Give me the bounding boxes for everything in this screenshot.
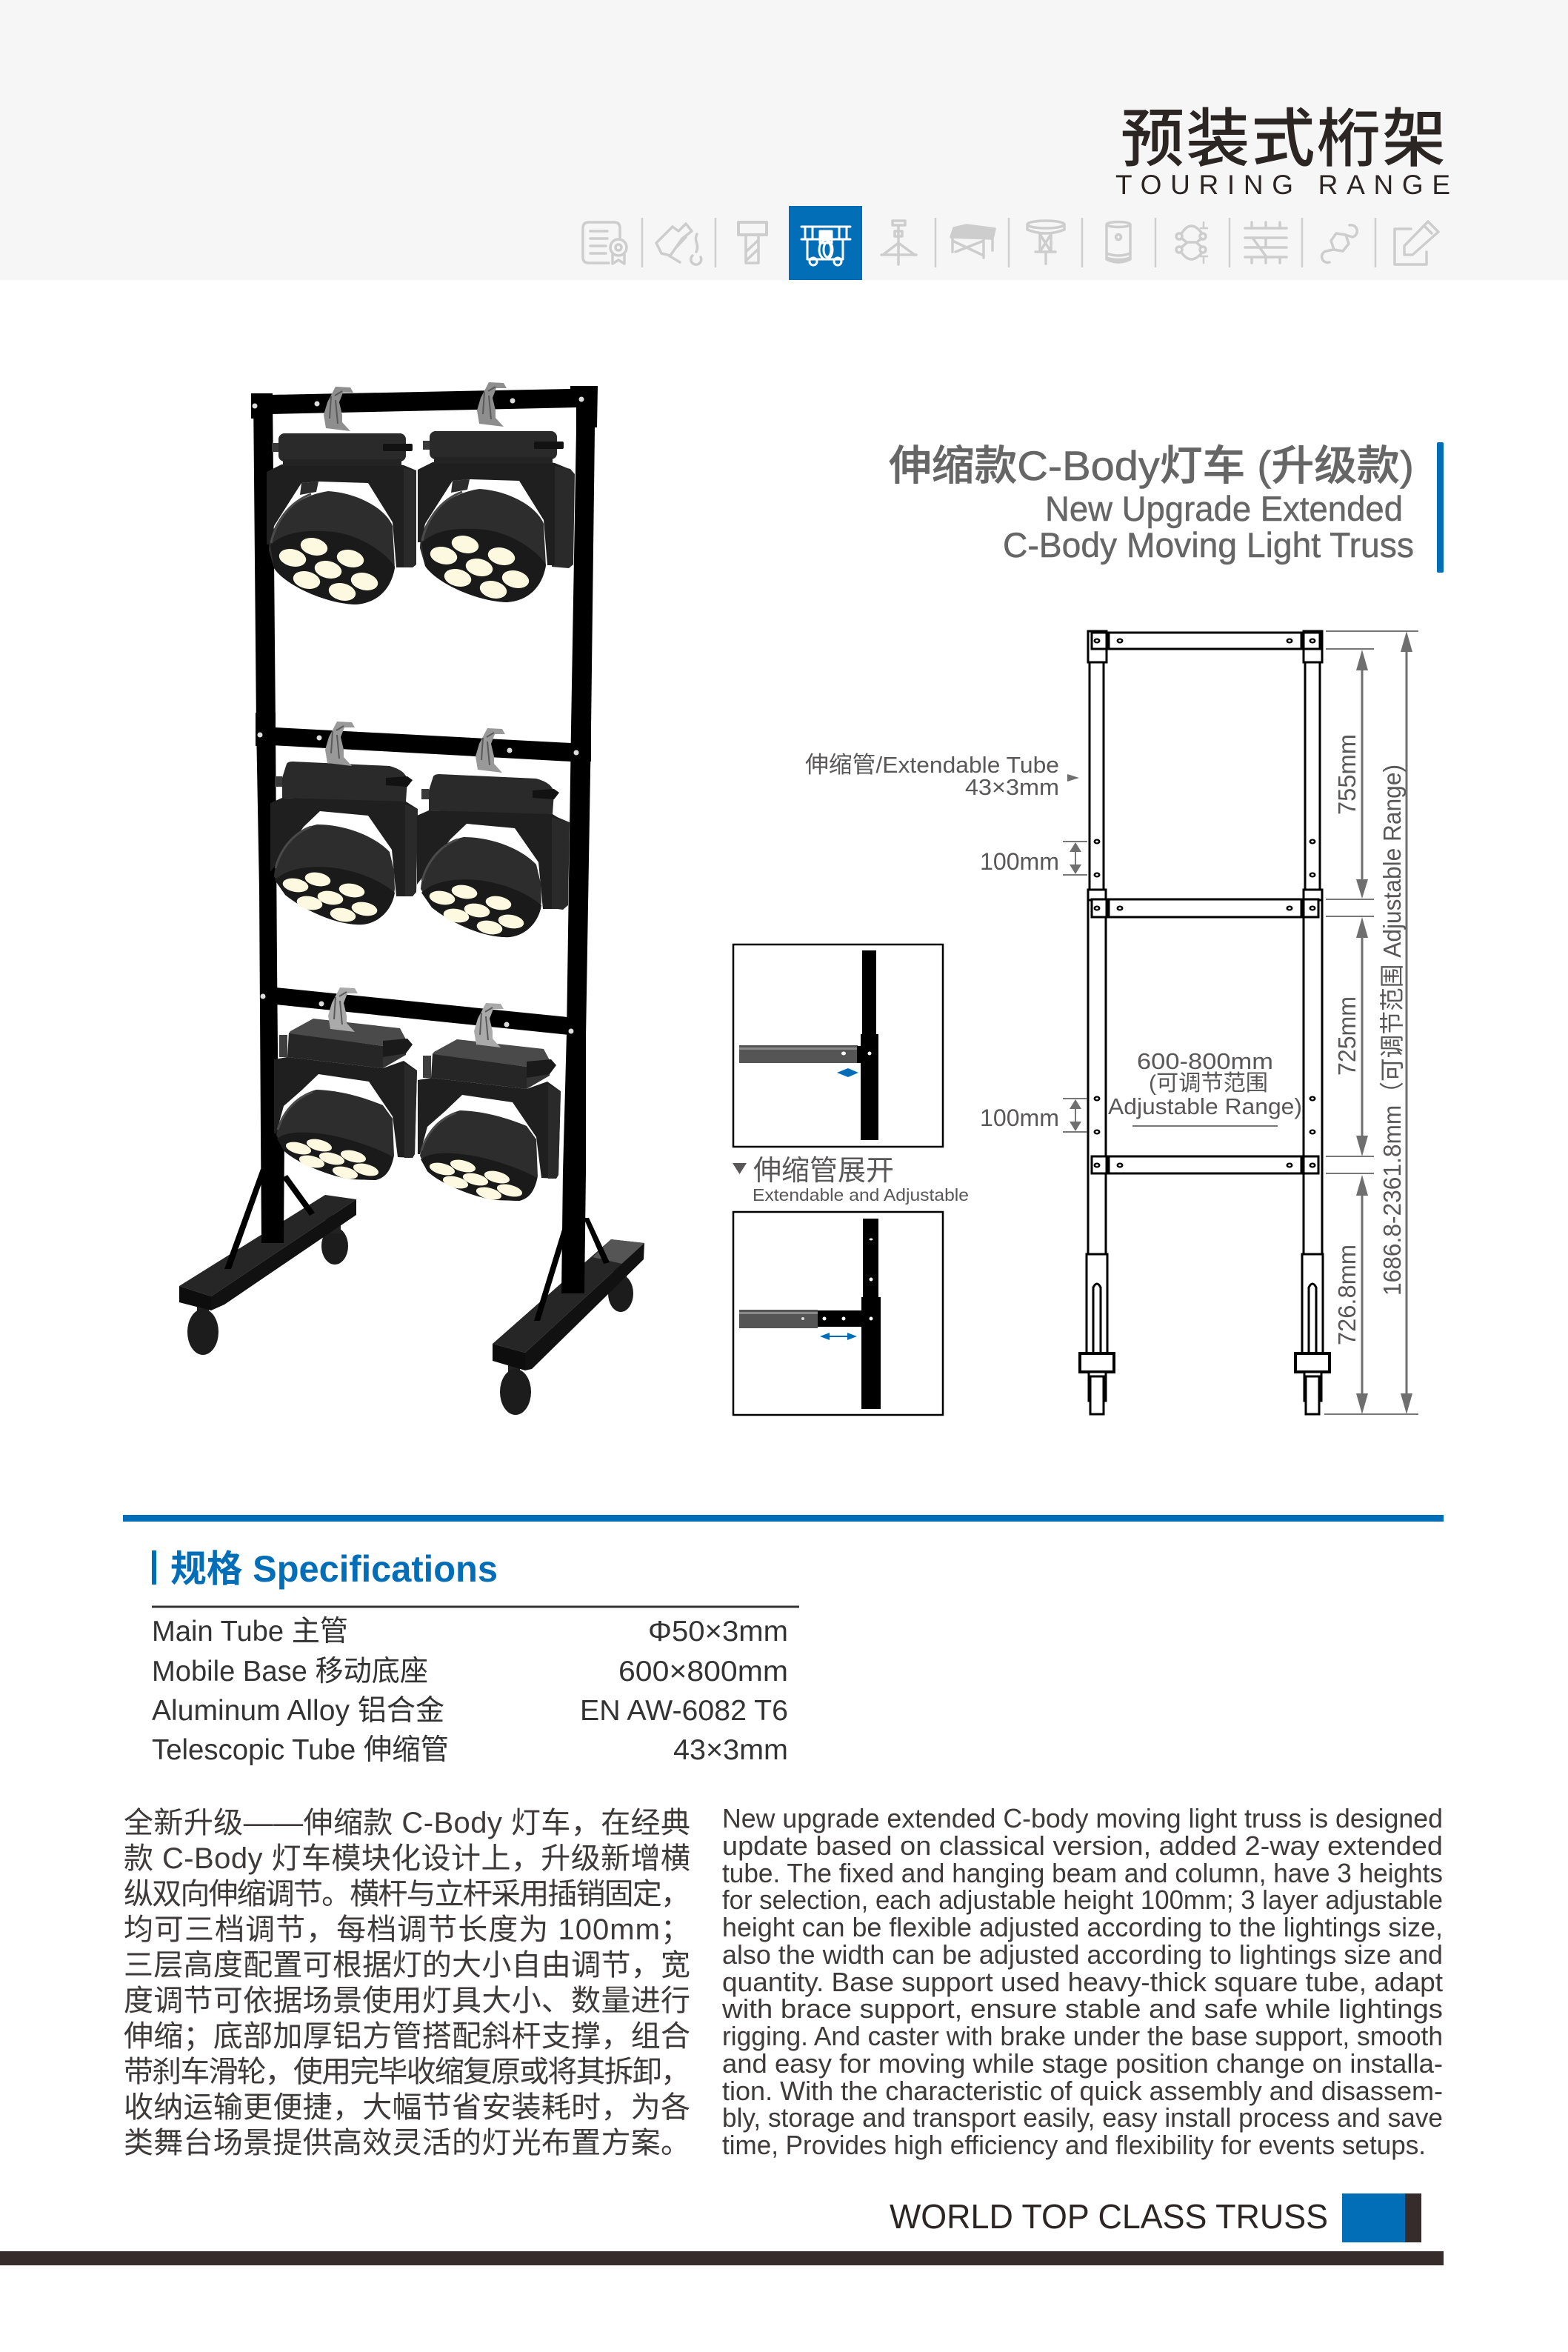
spec row: telescopic tube <box>152 1734 788 1766</box>
icon: double clamp <box>1176 222 1207 263</box>
spec row: aluminum alloy: EN AW-6082 T6 <box>580 1695 788 1727</box>
english description: update based on classical version, added 2-way extended <box>722 1830 1443 1861</box>
spec row: main tube: Main Tube 主管 <box>152 1616 348 1648</box>
right base beam <box>493 1239 644 1370</box>
footer slogan: WORLD TOP CLASS TRUSS <box>890 2197 1328 2236</box>
dimension 725mm: 725mm <box>1333 996 1361 1076</box>
chinese description: 全新升级——伸缩款 C-Body 灯车，在经典 <box>124 1807 690 1839</box>
middle beam <box>1088 890 1322 917</box>
icon: lift table <box>1027 221 1064 264</box>
english description: tion. With the characteristic of quick assembly and disassem- <box>722 2076 1443 2106</box>
english description: rigging. And caster with brake under the base support, smooth <box>722 2021 1443 2051</box>
chinese description: 三层高度配置可根据灯的大小自由调节，宽 <box>124 1949 690 1982</box>
blue arrow short <box>837 1068 858 1077</box>
icon: edit note <box>1395 221 1438 264</box>
english description: New upgrade extended C-body moving light truss is designed <box>722 1803 1443 1833</box>
icon: tripod tower <box>881 221 916 264</box>
english description: also the width can be adjusted according to lightings size and <box>722 1939 1443 1970</box>
dimension lines <box>1324 631 1418 1414</box>
english description <box>721 1803 1443 2160</box>
product render: mobile truss cart with moving lights <box>179 382 644 1415</box>
chinese description: 伸缩；底部加厚铝方管搭配斜杆支撑，组合 <box>124 2020 690 2053</box>
spec row: aluminum alloy <box>152 1695 788 1727</box>
100mm label lower: 100mm <box>980 1105 1059 1131</box>
icon: tools <box>656 224 701 264</box>
heading accent bar <box>1437 442 1444 573</box>
moving lights row 3 <box>274 1019 561 1202</box>
100mm small dimension arrows <box>1063 842 1087 1132</box>
blue section divider <box>123 1515 1444 1522</box>
inset caption: Extendable and Adjustable <box>753 1185 969 1205</box>
icon: drum <box>1107 222 1130 262</box>
right column <box>1295 659 1330 1414</box>
icon: chain hook <box>1322 225 1357 262</box>
spec row: mobile base: Mobile Base 移动底座 <box>152 1656 428 1688</box>
inset: extended tube <box>733 1212 943 1415</box>
english description: for selection, each adjustable height 100mm; 3 layer adjustable <box>722 1885 1443 1915</box>
diagonal braces <box>224 1169 610 1321</box>
chinese description: 均可三档调节，每档调节长度为 100mm； <box>124 1913 690 1946</box>
inset caption: 伸缩管展开 <box>753 1156 894 1187</box>
spec row: main tube: Φ50×3mm <box>648 1616 788 1648</box>
hanging clamps <box>324 382 507 1047</box>
spec row: aluminum alloy: Aluminum Alloy 铝合金 <box>152 1695 444 1727</box>
inset caption <box>733 1156 969 1205</box>
specifications panel <box>152 1548 799 1766</box>
icon: certificate <box>583 222 627 264</box>
inset: collapsed tube <box>733 945 943 1147</box>
chinese description: 带刹车滑轮，使用完毕收缩复原或将其拆卸， <box>124 2056 690 2088</box>
heading english line 1: New Upgrade Extended <box>1045 489 1403 528</box>
icon: truss bolt <box>738 222 767 263</box>
english description: with brace support, ensure stable and safe while lightings <box>721 1993 1443 2024</box>
heading english line 2: C-Body Moving Light Truss <box>1003 525 1414 564</box>
english description: time, Provides high efficiency and flexibility for events setups. <box>722 2130 1426 2160</box>
extendable tube label: 43×3mm <box>965 774 1059 800</box>
technical drawing <box>1063 631 1418 1414</box>
heading chinese: 伸缩款C-Body灯车 (升级款) <box>889 442 1414 489</box>
english description: bly, storage and transport easily, easy install process and save <box>722 2102 1443 2133</box>
left base beam <box>179 1195 356 1310</box>
english description: height can be flexible adjusted according to the lightings size, <box>722 1912 1443 1942</box>
spec row: mobile base <box>152 1656 788 1688</box>
width annotation <box>1108 1048 1302 1126</box>
top cross bar <box>251 386 598 427</box>
specifications heading: 规格 Specifications <box>170 1548 498 1590</box>
title chinese: 预装式桁架 <box>1121 104 1446 175</box>
header band <box>0 0 1568 280</box>
width annotation: (可调节范围 <box>1149 1071 1268 1096</box>
lower beam <box>1092 1156 1318 1173</box>
footer brand mark <box>1342 2193 1421 2242</box>
chinese description: 类舞台场景提供高效灵活的灯光布置方案。 <box>124 2127 690 2159</box>
english description: tube. The fixed and hanging beam and column, have 3 heights <box>722 1858 1443 1888</box>
dimension 755mm: 755mm <box>1333 734 1361 815</box>
top beam <box>1088 631 1322 662</box>
english description: and easy for moving while stage position change on installa- <box>722 2048 1443 2079</box>
overall height range: 1686.8-2361.8mm（可调节范围 Adjustable Range) <box>1378 764 1406 1296</box>
dimension 726.8mm: 726.8mm <box>1333 1245 1361 1345</box>
english description: quantity. Base support used heavy-thick square tube, adapt <box>722 1967 1443 1997</box>
product heading block <box>889 442 1444 573</box>
icon: stage <box>951 225 995 258</box>
icon: active light truss cart <box>789 206 862 280</box>
lower cross bar <box>261 986 586 1035</box>
extendable tube label <box>805 752 1079 800</box>
footer bar <box>0 2251 1444 2265</box>
moving lights row 1 <box>267 431 575 604</box>
title english: TOURING RANGE <box>1115 170 1450 200</box>
pin holes <box>1093 639 1315 1167</box>
chinese description: 款 C-Body 灯车模块化设计上，升级新增横 <box>124 1842 690 1875</box>
icon: beams <box>1245 222 1287 263</box>
caster wheels <box>187 1215 633 1415</box>
chinese description: 纵双向伸缩调节。横杆与立杆采用插销固定， <box>124 1878 690 1910</box>
left column <box>1080 659 1114 1414</box>
extendable tube label: 伸缩管/Extendable Tube <box>805 752 1059 778</box>
middle cross bar <box>256 713 591 762</box>
width annotation: Adjustable Range) <box>1108 1093 1302 1119</box>
blue arrow long <box>820 1333 857 1340</box>
moving lights row 2 <box>270 762 570 937</box>
spec row: main tube <box>152 1616 788 1648</box>
width annotation: 600-800mm <box>1137 1048 1273 1074</box>
spec row: telescopic tube: Telescopic Tube 伸缩管 <box>152 1734 449 1766</box>
chinese description <box>124 1807 690 2159</box>
chinese description: 度调节可依据场景使用灯具大小、数量进行 <box>124 1985 690 2017</box>
100mm label upper: 100mm <box>980 848 1059 875</box>
spec row: mobile base: 600×800mm <box>618 1656 788 1688</box>
uprights <box>253 386 598 1293</box>
chinese description: 收纳运输更便捷，大幅节省安装耗时，为各 <box>124 2091 690 2124</box>
category icon nav bar <box>583 206 1438 280</box>
spec row: telescopic tube: 43×3mm <box>673 1734 788 1766</box>
